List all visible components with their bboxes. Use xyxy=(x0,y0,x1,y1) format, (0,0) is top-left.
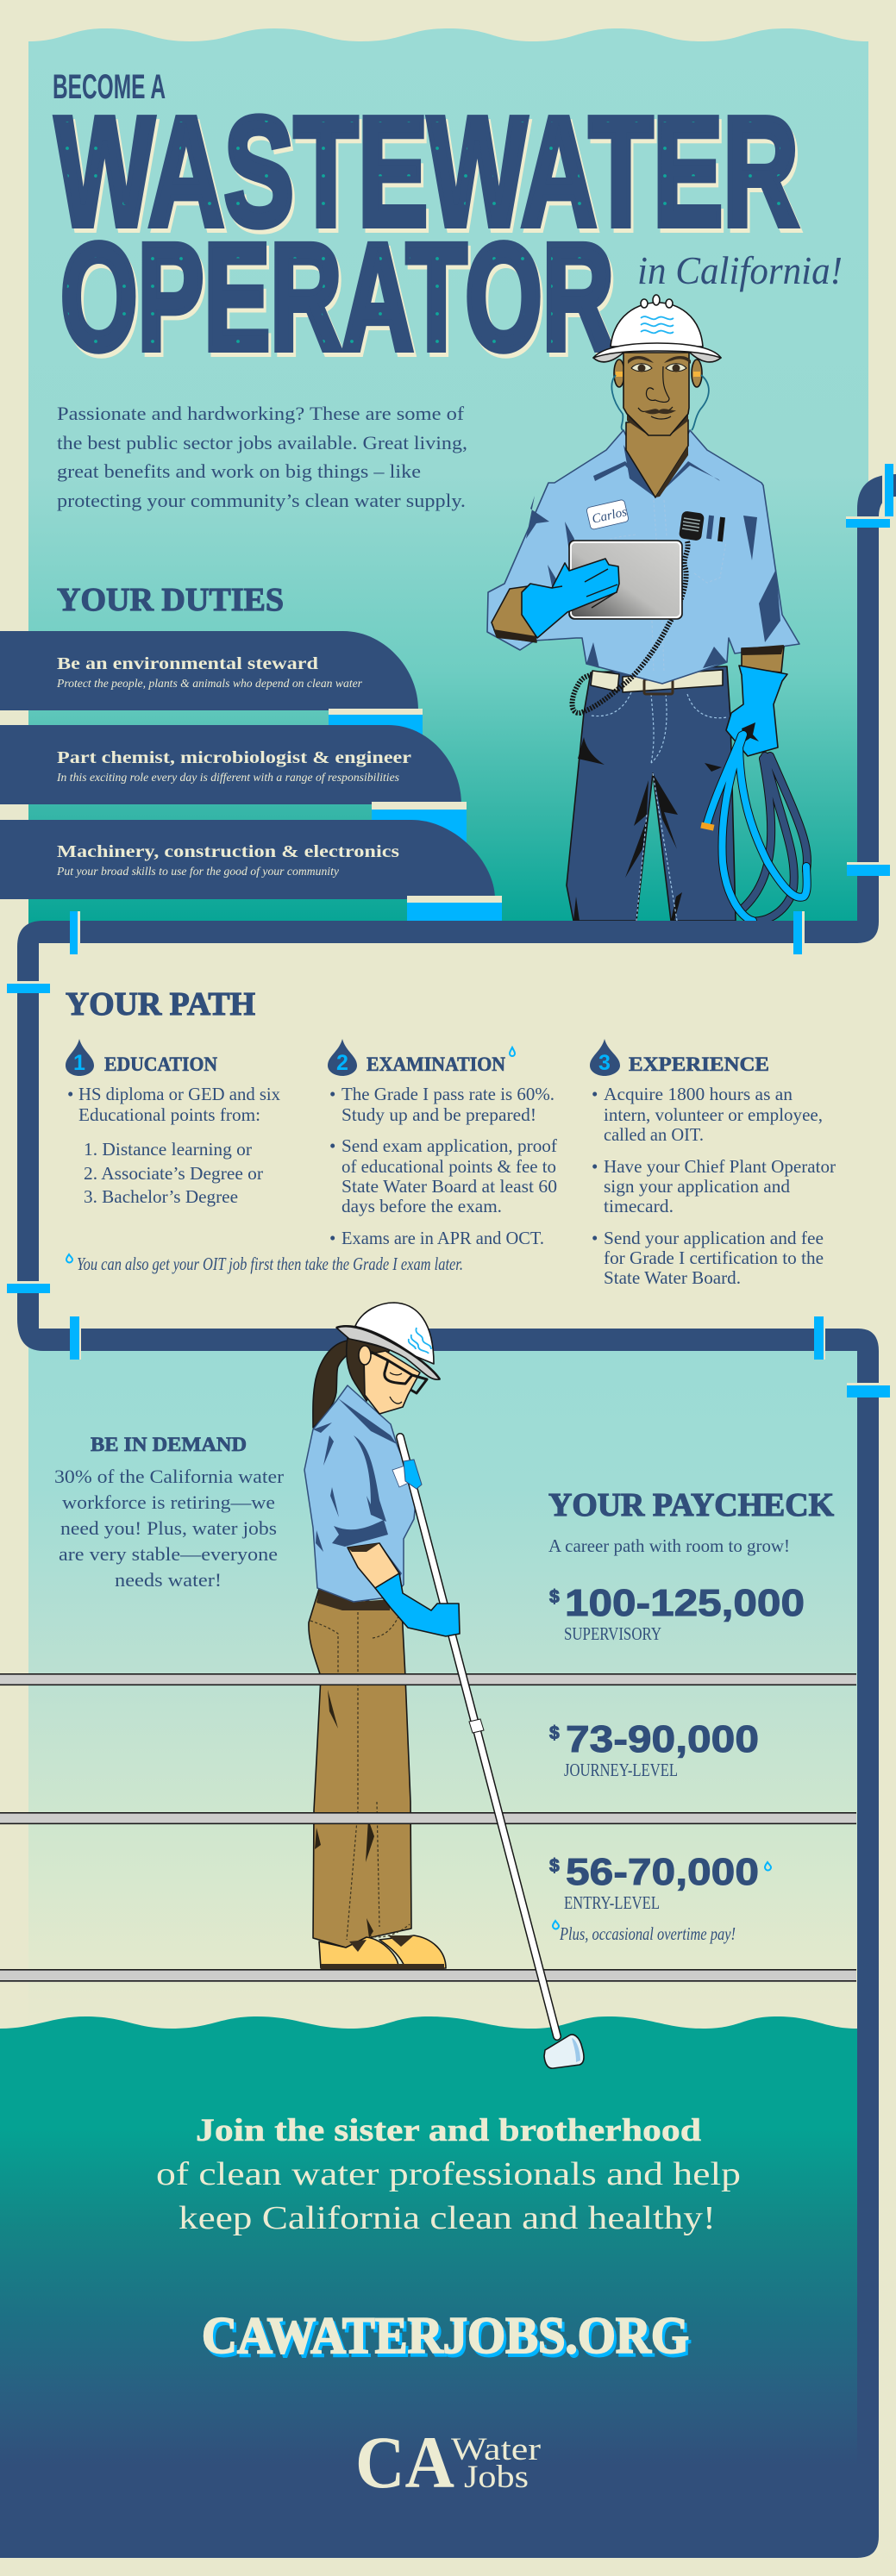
head xyxy=(364,1351,420,1414)
footnote drop xyxy=(510,1047,515,1056)
illustration: male operator xyxy=(487,295,807,922)
glove grip xyxy=(742,722,759,741)
duty 2 connector xyxy=(372,802,467,861)
facial features xyxy=(628,356,691,419)
water and footer background xyxy=(0,2016,857,2474)
be in demand heading: BE IN DEMAND xyxy=(91,1434,247,1455)
ear cords xyxy=(611,375,709,430)
operator: OPERATOR xyxy=(63,217,617,386)
your path heading: YOUR PATH xyxy=(66,986,255,1022)
journey-level salary: 73-90,000 xyxy=(566,1718,759,1760)
mop pole xyxy=(400,1437,557,2036)
duty 3 connector xyxy=(407,896,502,923)
experience bullets: timecard. xyxy=(604,1196,674,1216)
coil cord xyxy=(573,541,688,713)
lower glove xyxy=(375,1573,460,1636)
shirt folds xyxy=(313,1398,402,1582)
shirt folds xyxy=(526,445,780,668)
be in demand copy: workforce is retiring—we xyxy=(62,1491,275,1513)
tablet xyxy=(569,541,682,619)
supervisory salary: SUPERVISORY xyxy=(564,1623,661,1644)
join line 3: keep California clean and healthy! xyxy=(179,2200,716,2236)
forearm shadow xyxy=(742,645,784,655)
mouth xyxy=(390,1372,402,1404)
be in demand copy: need you! Plus, water jobs xyxy=(60,1517,277,1539)
jeans shadows xyxy=(573,737,722,921)
footnote: You can also get your OIT job first then take the Grade I exam later. xyxy=(77,1254,463,1274)
supervisory salary: $ xyxy=(549,1587,560,1607)
entry-level salary xyxy=(549,1851,759,1913)
duty 1 connector xyxy=(329,709,423,758)
your duties heading: YOUR DUTIES xyxy=(57,582,284,618)
heading block xyxy=(53,68,843,386)
experience bullets: State Water Board. xyxy=(604,1267,741,1288)
shirt xyxy=(487,430,799,684)
glove finger lines xyxy=(552,569,617,608)
duties list xyxy=(0,631,502,923)
examination bullets: Send exam application, proof xyxy=(341,1135,557,1156)
shirt stitching xyxy=(605,500,726,672)
salary footnote drop xyxy=(765,1862,771,1871)
logo: CA xyxy=(355,2421,454,2504)
duty 1 xyxy=(0,631,423,715)
drop icon 3: 3 xyxy=(598,1051,611,1075)
drop icon 2 xyxy=(328,1039,357,1076)
education bullets: 1. Distance learning or xyxy=(84,1139,252,1160)
intro paragraph: protecting your community’s clean water supply. xyxy=(57,490,466,511)
experience bullets xyxy=(592,1084,836,1288)
entry-level salary: ENTRY-LEVEL xyxy=(564,1892,660,1913)
paycheck heading: YOUR PAYCHECK xyxy=(548,1487,834,1523)
journey-level salary: $ xyxy=(549,1723,560,1743)
glove on tablet xyxy=(522,559,619,638)
examination bullets: days before the exam. xyxy=(341,1196,502,1216)
supervisory salary xyxy=(549,1582,805,1644)
experience bullets: Have your Chief Plant Operator xyxy=(604,1156,836,1177)
jeans xyxy=(567,666,736,921)
join headline: Join the sister and brotherhood xyxy=(196,2113,701,2148)
duty 1: Be an environmental steward xyxy=(57,654,318,673)
be in demand block xyxy=(54,1434,285,1591)
rail 2 xyxy=(0,1812,856,1824)
become a: BECOME A xyxy=(53,68,166,106)
jeans stitching xyxy=(591,692,727,921)
name tag: Carlos xyxy=(591,505,629,527)
duty 3: Machinery, construction & electronics xyxy=(57,842,399,861)
right glove xyxy=(726,666,787,756)
duty 2: In this exciting role every day is different with a range of responsibilities xyxy=(56,772,400,785)
railings xyxy=(0,1673,856,1982)
left forearm xyxy=(492,586,536,642)
drop icon 1: 1 xyxy=(73,1051,85,1075)
paycheck subheading: A career path with room to grow! xyxy=(548,1535,790,1556)
experience bullets: Acquire 1800 hours as an xyxy=(604,1084,793,1104)
ponytail xyxy=(313,1341,349,1428)
examination bullets: The Grade I pass rate is 60%. xyxy=(341,1084,555,1104)
forearm xyxy=(348,1543,399,1588)
pants xyxy=(309,1589,411,1948)
be in demand copy: are very stable—everyone xyxy=(59,1543,278,1565)
illustration: female operator xyxy=(304,1303,446,1970)
hair xyxy=(347,1338,390,1401)
face xyxy=(623,352,689,435)
join line 2: of clean water professionals and help xyxy=(156,2156,741,2192)
examination bullets: • xyxy=(329,1135,335,1156)
be in demand copy xyxy=(54,1466,285,1591)
drop icon 3 xyxy=(590,1039,620,1076)
pants seam xyxy=(315,1690,374,1938)
operator xyxy=(60,213,617,386)
examination bullets: • xyxy=(329,1228,335,1248)
intro paragraph: the best public sector jobs available. Great living, xyxy=(57,432,467,453)
examination bullets: of educational points & fee to xyxy=(341,1156,556,1177)
ear plugs xyxy=(616,372,700,377)
logo: Water xyxy=(451,2432,541,2467)
radio mic and pens xyxy=(679,510,723,541)
intro paragraph: great benefits and work on big things – like xyxy=(57,460,421,482)
your path section xyxy=(66,986,836,1288)
examination bullets: Exams are in APR and OCT. xyxy=(341,1228,544,1248)
experience heading: EXPERIENCE xyxy=(629,1054,769,1075)
hose plug xyxy=(700,822,714,831)
experience bullets: • xyxy=(592,1084,598,1104)
experience bullets: called an OIT. xyxy=(604,1124,704,1145)
name tag xyxy=(586,499,629,530)
website url: CAWATERJOBS.ORG xyxy=(202,2307,689,2364)
entry-level salary: 56-70,000 xyxy=(566,1851,759,1893)
examination bullets: • xyxy=(329,1084,335,1104)
journey-level salary: JOURNEY-LEVEL xyxy=(564,1760,678,1780)
experience bullets: sign your application and xyxy=(604,1176,791,1197)
rail 1 xyxy=(0,1673,856,1685)
hard hat xyxy=(593,295,721,362)
hat logo xyxy=(641,316,674,333)
call to action xyxy=(156,2113,741,2236)
intro paragraph: Passionate and hardworking? These are some of xyxy=(57,403,465,424)
rail 3 xyxy=(0,1969,856,1982)
entry-level salary: $ xyxy=(549,1856,560,1876)
education bullets: 2. Associate’s Degree or xyxy=(84,1163,263,1184)
duty 3: Put your broad skills to use for the good of your community xyxy=(56,866,340,878)
collar and neck xyxy=(626,420,688,497)
bottom panel xyxy=(28,1345,857,2035)
hat logo xyxy=(409,1328,431,1354)
experience bullets: for Grade I certification to the xyxy=(604,1247,824,1268)
belt xyxy=(316,1589,391,1610)
website url: CAWATERJOBS.ORG xyxy=(204,2310,692,2367)
intro paragraph xyxy=(57,403,467,511)
education bullets: HS diploma or GED and six xyxy=(78,1084,280,1104)
hose xyxy=(707,735,807,921)
sleeve shadow xyxy=(348,1543,379,1552)
be in demand copy: needs water! xyxy=(115,1569,222,1591)
overtime footnote xyxy=(553,1921,736,1944)
examination heading: EXAMINATION xyxy=(367,1054,505,1075)
examination bullets: Study up and be prepared! xyxy=(341,1104,536,1125)
education bullets: 3. Bachelor’s Degree xyxy=(84,1186,238,1207)
your paycheck block xyxy=(548,1487,834,1944)
education column xyxy=(66,1039,280,1207)
mop and hands xyxy=(375,1437,584,2068)
hard hat xyxy=(336,1303,440,1379)
examination bullets: State Water Board at least 60 xyxy=(341,1176,557,1197)
hose back loops xyxy=(742,756,807,922)
education bullets xyxy=(67,1084,280,1207)
examination bullets xyxy=(329,1084,557,1248)
badge xyxy=(392,1466,412,1487)
right forearm xyxy=(742,647,784,672)
duty 2: Part chemist, microbiologist & engineer xyxy=(57,748,411,767)
drop icon 2: 2 xyxy=(336,1051,348,1075)
belt xyxy=(591,670,723,694)
top panel with wavy water edge xyxy=(28,28,868,931)
mop bucket xyxy=(544,2035,584,2068)
education bullets: • xyxy=(67,1084,73,1104)
education heading: EDUCATION xyxy=(104,1054,217,1075)
glasses xyxy=(371,1352,427,1393)
overtime footnote: Plus, occasional overtime pay! xyxy=(559,1923,736,1944)
pants details xyxy=(310,1612,410,1940)
journey-level salary xyxy=(549,1718,759,1780)
logo xyxy=(355,2421,541,2504)
experience bullets: • xyxy=(592,1228,598,1248)
upper glove xyxy=(404,1460,422,1489)
neck shadow xyxy=(627,415,688,497)
supervisory salary: 100-125,000 xyxy=(565,1582,805,1624)
duty 1: Protect the people, plants & animals who depend on clean water xyxy=(56,678,363,691)
experience bullets: intern, volunteer or employee, xyxy=(604,1104,823,1125)
experience bullets: Send your application and fee xyxy=(604,1228,824,1248)
drop icon 1 xyxy=(66,1039,94,1076)
pipe clamps xyxy=(7,464,893,1397)
ears xyxy=(614,360,702,387)
duty 2 xyxy=(0,725,467,810)
left forearm shadow xyxy=(493,629,536,642)
in california: in California! xyxy=(637,248,843,292)
boots xyxy=(319,1935,446,1970)
be in demand copy: 30% of the California water xyxy=(54,1466,285,1487)
examination column xyxy=(328,1039,557,1248)
experience column xyxy=(590,1039,836,1288)
duty 3 xyxy=(0,820,502,903)
tablet rim xyxy=(571,542,680,617)
experience bullets: • xyxy=(592,1156,598,1177)
education bullets: Educational points from: xyxy=(78,1104,260,1125)
logo: Jobs xyxy=(464,2460,529,2495)
shirt xyxy=(304,1385,417,1602)
operator: OPERATOR xyxy=(60,213,614,382)
ear xyxy=(359,1346,371,1365)
